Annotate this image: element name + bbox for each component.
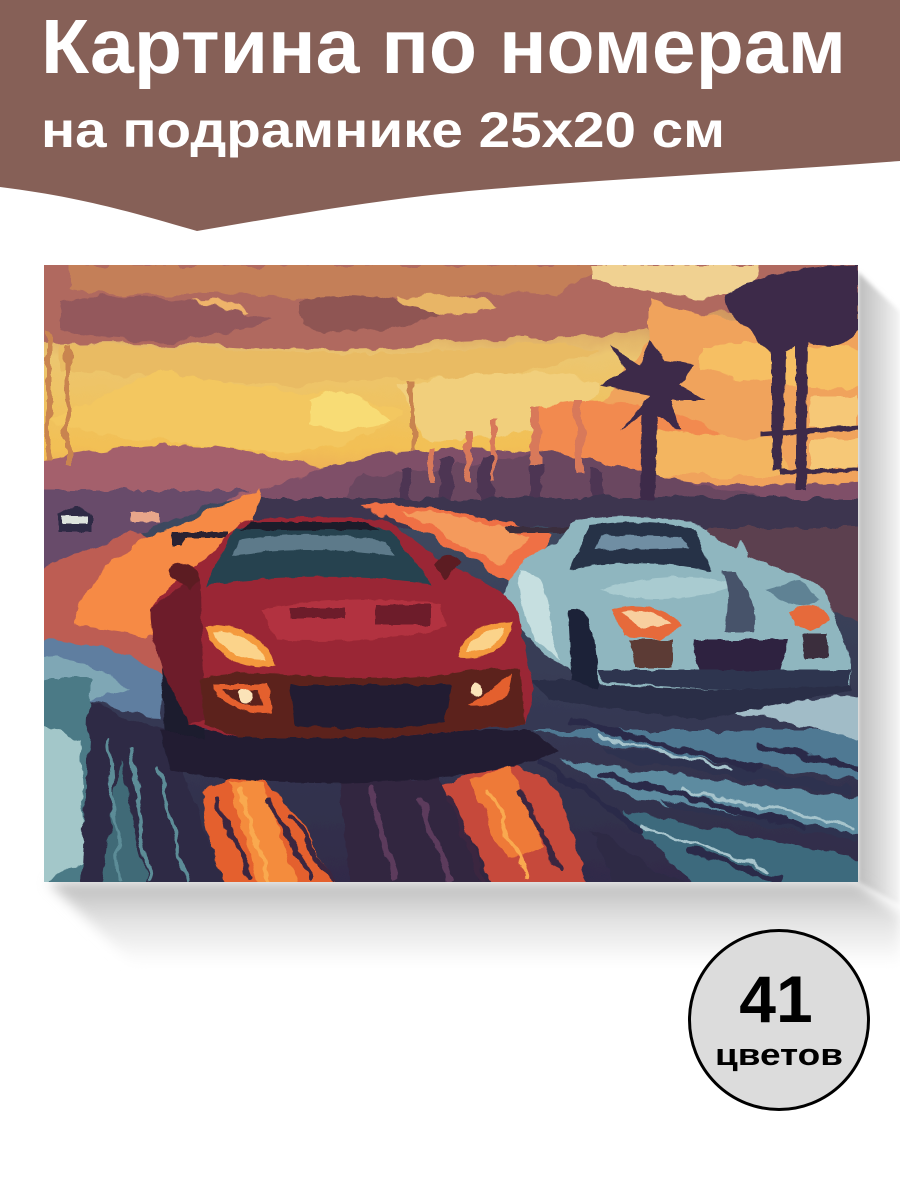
painting: two race cars at sunset — [30, 255, 870, 895]
hills and wall — [44, 330, 858, 502]
title: Картина по номерам — [41, 4, 846, 90]
near palm — [640, 410, 658, 500]
header banner — [0, 0, 900, 231]
sky — [44, 265, 858, 486]
headlights — [205, 626, 276, 667]
road stroke marks — [108, 720, 858, 880]
canvas shadow — [48, 272, 900, 965]
distant cars — [58, 507, 160, 532]
spoiler — [172, 532, 228, 545]
hood — [262, 600, 447, 641]
subtitle: на подрамнике 25x20 см — [41, 102, 725, 158]
palm trees — [600, 265, 858, 500]
hood stripes — [722, 572, 755, 632]
road — [30, 490, 870, 895]
wheels — [160, 666, 204, 731]
body — [150, 517, 534, 738]
blue streaks — [530, 730, 870, 780]
mirrors — [168, 563, 200, 590]
far palm — [772, 340, 808, 490]
fog lights — [212, 684, 272, 713]
windshield — [205, 524, 432, 586]
badge: 41 colours — [690, 930, 868, 1110]
red car — [150, 517, 534, 740]
silver car — [500, 517, 850, 690]
red reflections — [202, 778, 335, 882]
shadow under cars — [160, 680, 852, 783]
badge label: цветов — [715, 1037, 843, 1072]
badge number: 41 — [739, 962, 813, 1036]
lower bumper — [200, 669, 525, 738]
